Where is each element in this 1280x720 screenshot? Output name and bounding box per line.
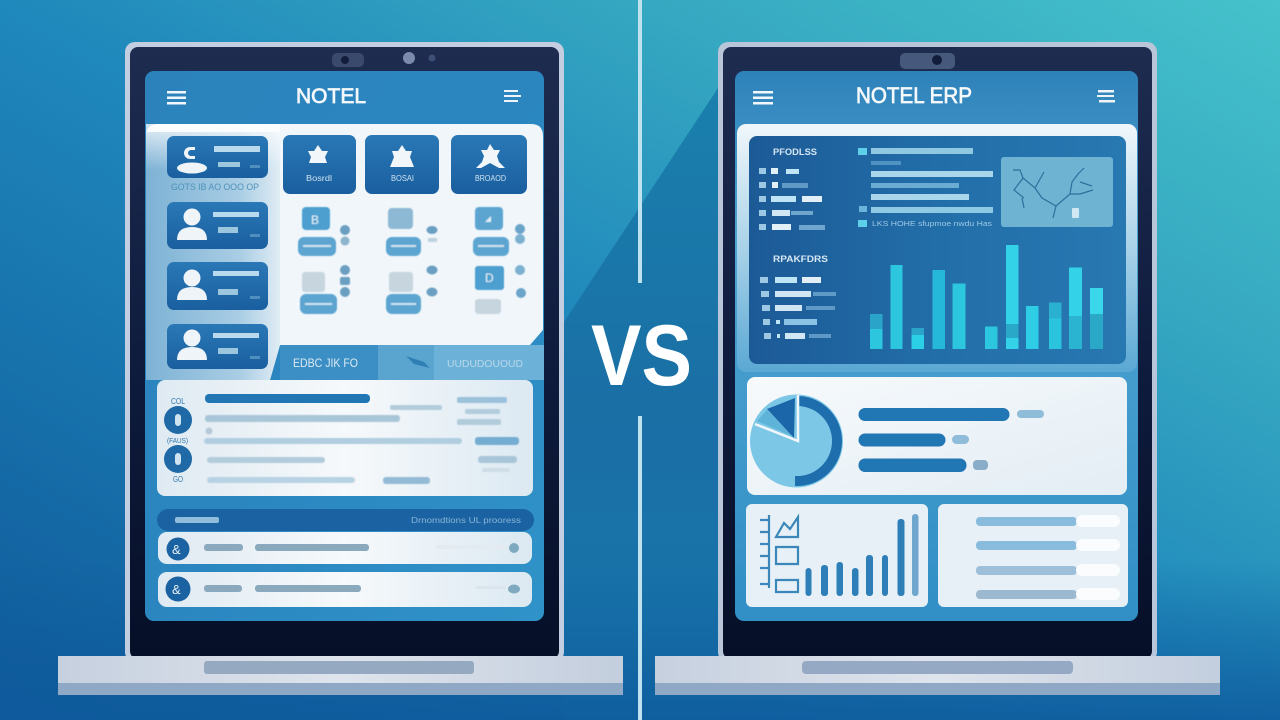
top left list (759, 168, 825, 230)
header: menu icon (167, 91, 186, 104)
tile 3: BROAOD (475, 173, 506, 183)
analytics panel (749, 136, 1126, 364)
small bar chart panel (746, 504, 928, 607)
top left list heading: PFODLSS (773, 147, 817, 158)
heading: VS: VS (591, 308, 692, 404)
laptop base (655, 656, 1220, 695)
card 1 caption: GOTS IB AO OOO OP (171, 182, 259, 193)
card 4 (167, 324, 268, 369)
tile 2: BOSAI (391, 173, 414, 183)
laptop bezel (718, 42, 1157, 662)
map thumbnail (1001, 157, 1113, 227)
bottom left list (760, 277, 836, 339)
screen (735, 71, 1138, 621)
list row 1: & (172, 542, 181, 557)
divider: vertical line below VS (638, 416, 642, 720)
round icons: COL (171, 397, 185, 406)
camera bar (900, 53, 955, 69)
tile 1: Bosrdl (306, 173, 332, 183)
tile 2 (365, 135, 439, 194)
screen (145, 71, 544, 621)
bottom tab bar (280, 345, 544, 380)
pie chart (750, 394, 843, 488)
feature tiles (283, 135, 527, 194)
column 2 controls (386, 208, 438, 314)
text bars block: LKS HOHE sfupmoe nwdu Has (872, 219, 992, 228)
axis labels (760, 515, 798, 592)
column 1 controls (298, 207, 350, 314)
round icons (164, 397, 192, 484)
header title: NOTEL ERP (856, 83, 972, 108)
round icons: GO (173, 475, 183, 484)
tile 1 (283, 135, 356, 194)
main white panel (146, 124, 543, 380)
round icons: (FAUS) (167, 436, 188, 445)
card 3 (167, 262, 268, 310)
placeholder rows (204, 397, 519, 484)
bar chart (870, 245, 1103, 349)
laptop bezel (125, 42, 564, 662)
card 1 (167, 136, 268, 178)
laptop base (58, 656, 623, 695)
list row 2 (158, 572, 532, 607)
card 2 (167, 202, 268, 249)
white frame around analytics panel (737, 124, 1137, 372)
small list panel (938, 504, 1128, 607)
bars (806, 514, 918, 596)
legend bars (858, 408, 1044, 472)
laptop: Notel ERP (right) (655, 42, 1220, 695)
header title: NOTEL (296, 85, 366, 108)
tile 3 (451, 135, 527, 194)
column 3 controls (473, 207, 526, 314)
column 1 controls: B (311, 213, 319, 227)
header: filter icon (504, 90, 521, 102)
list header bar: Drnomdtions UL prooress (411, 516, 521, 525)
header: filter icon (1097, 90, 1115, 102)
bottom tab bar: UUDUDOUOUD (447, 358, 523, 370)
text bars block (858, 148, 993, 228)
list header bar (157, 509, 534, 531)
list row 1 (158, 532, 532, 564)
details panel (157, 380, 533, 496)
bottom tab bar: EDBC JIK FO (293, 356, 358, 370)
list row 2: & (172, 582, 181, 597)
title bar (205, 394, 370, 403)
header: menu icon (753, 91, 773, 104)
pie summary panel (747, 377, 1127, 495)
camera bar (332, 52, 436, 67)
laptop: Notel (left) (58, 42, 623, 695)
column 3 controls: D (485, 271, 494, 285)
bottom left list heading: RPAKFDRS (773, 254, 828, 265)
sidebar profile cards (167, 136, 268, 369)
divider: vertical line above VS (638, 0, 642, 283)
